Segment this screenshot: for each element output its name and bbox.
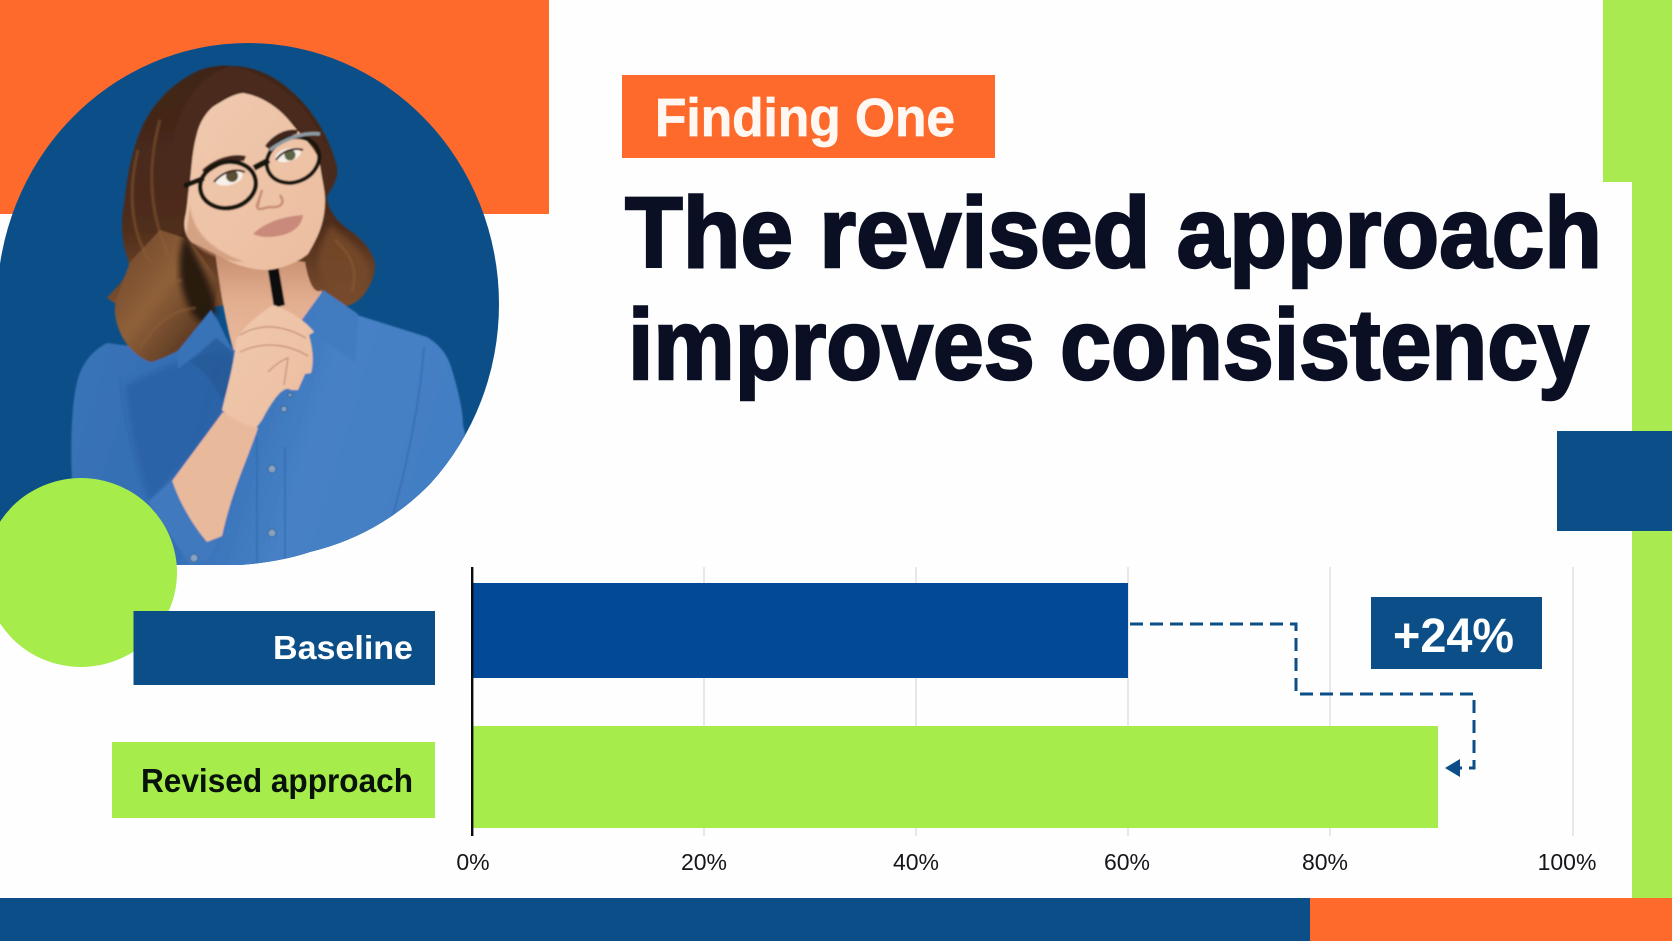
hand (222, 305, 314, 428)
right hair lock highlight (318, 226, 368, 278)
buttons (190, 393, 292, 562)
forearm (172, 412, 258, 542)
pen (267, 267, 286, 308)
hair fringe over forehead (188, 66, 320, 182)
revised approach label: Revised approach (141, 762, 413, 799)
bottom orange band (1310, 898, 1672, 941)
lips (253, 215, 303, 237)
pen tip (267, 257, 275, 263)
baseline label (134, 611, 435, 685)
+24% callout (1371, 597, 1542, 669)
axis labels: 40% (893, 849, 939, 875)
woman illustration (70, 64, 466, 565)
neck (215, 250, 322, 352)
left hair lock over shirt (115, 230, 218, 362)
orange corner block (0, 0, 549, 214)
finger shadow (240, 327, 308, 385)
axis labels: 60% (1104, 849, 1150, 875)
glasses (184, 129, 327, 213)
left collar (177, 310, 234, 369)
right green stripe (1603, 0, 1672, 898)
axis labels: 0% (456, 849, 490, 875)
axis labels: 80% (1302, 849, 1348, 875)
title (625, 177, 1602, 401)
eyes (214, 145, 303, 188)
shirt shadow (126, 360, 225, 495)
navy accent block on right (1557, 431, 1672, 531)
axis line (471, 567, 473, 836)
axis labels: 100% (1538, 849, 1596, 875)
axis labels: 20% (681, 849, 727, 875)
title: The revised approach (625, 177, 1602, 289)
hair strands (130, 120, 356, 318)
shirt body (70, 292, 466, 565)
nose (257, 190, 282, 209)
finding one tag (622, 75, 995, 158)
sleeve seams (256, 348, 424, 564)
dashed arrow from baseline to revised bar (1130, 624, 1474, 777)
revised approach bar (473, 726, 1438, 828)
collar gap shadow (190, 338, 233, 400)
gridlines (704, 567, 1573, 836)
finding one tag: Finding One (655, 88, 955, 148)
navy portrait circle (0, 43, 499, 565)
bar chart (112, 567, 1596, 875)
+24% callout: +24% (1393, 610, 1514, 663)
baseline label: Baseline (273, 629, 413, 666)
axis labels (456, 849, 1596, 875)
dark hair shadow (179, 232, 216, 323)
revised approach label (112, 742, 435, 818)
right collar (322, 289, 358, 316)
portrait: woman thinking with pen in navy circle (0, 43, 500, 580)
eyebrows (202, 130, 298, 175)
jaw shading (186, 205, 245, 262)
face (184, 93, 325, 270)
cuff (148, 480, 192, 552)
baseline bar (473, 583, 1128, 678)
green circle (0, 478, 177, 667)
hair back (106, 64, 376, 308)
title: improves consistency (628, 289, 1589, 401)
bottom navy band (0, 898, 1310, 941)
